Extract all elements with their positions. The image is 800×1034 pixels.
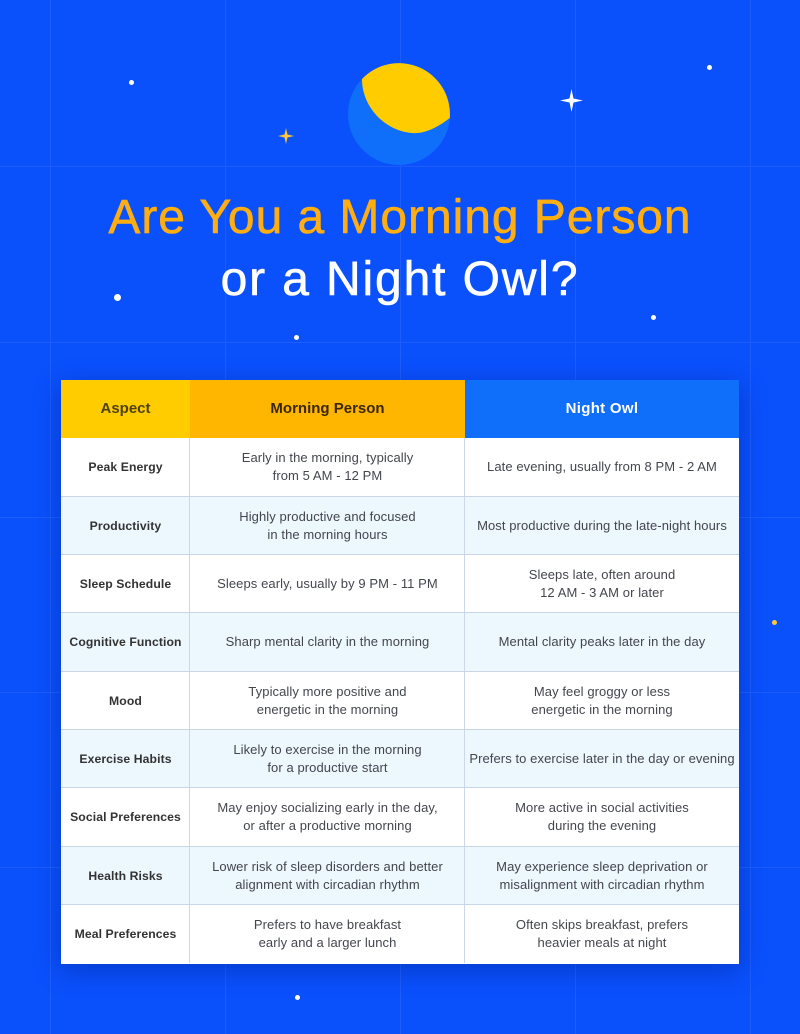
row: exercise habits: for a productive start bbox=[267, 760, 388, 774]
row: cognitive function: Cognitive Function bbox=[69, 635, 182, 649]
row: productivity: in the morning hours bbox=[267, 526, 388, 542]
row: sleep schedule: 12 AM - 3 AM or later bbox=[540, 584, 664, 600]
row: mood: Mood bbox=[109, 694, 142, 708]
row: productivity: Highly productive and focused bbox=[239, 508, 416, 524]
row: sleep schedule: Sleeps early, usually by 9 PM - 11 PM bbox=[217, 576, 438, 590]
row: exercise habits: Exercise Habits bbox=[79, 752, 172, 766]
row: social preferences: during the evening bbox=[548, 818, 656, 833]
row: cognitive function: Mental clarity peaks later in the day bbox=[499, 634, 705, 649]
row: social preferences: More active in social activities bbox=[515, 800, 689, 815]
row: social preferences: May enjoy socializing early in the day, bbox=[217, 800, 438, 815]
row: health risks: May experience sleep deprivation or bbox=[496, 858, 708, 874]
row: meal preferences: early and a larger lunch bbox=[259, 935, 396, 950]
row: health risks: misalignment with circadian rhythm bbox=[499, 876, 704, 892]
row: sleep schedule: Sleep Schedule bbox=[80, 576, 171, 590]
row: meal preferences: Prefers to have breakfast bbox=[254, 917, 401, 932]
row: mood: Typically more positive and bbox=[248, 684, 407, 698]
title bbox=[108, 191, 692, 306]
row: mood: energetic in the morning bbox=[257, 702, 398, 716]
row: health risks: alignment with circadian rhythm bbox=[235, 876, 420, 892]
row: productivity bbox=[61, 497, 739, 555]
row: peak energy: from 5 AM - 12 PM bbox=[273, 468, 382, 483]
row: sleep schedule bbox=[61, 555, 739, 613]
row: meal preferences: heavier meals at night bbox=[538, 935, 666, 950]
row: cognitive function: Sharp mental clarity in the morning bbox=[226, 634, 429, 649]
row: exercise habits: Likely to exercise in the morning bbox=[233, 742, 422, 756]
row: health risks bbox=[61, 847, 739, 905]
column heading: morning person bbox=[190, 380, 465, 438]
row: meal preferences bbox=[75, 905, 688, 963]
title: or a Night Owl? bbox=[221, 253, 579, 306]
row: exercise habits bbox=[61, 730, 739, 788]
row: social preferences: Social Preferences bbox=[70, 810, 181, 824]
row: social preferences: or after a productive morning bbox=[243, 818, 412, 833]
row: productivity: Most productive during the late-night hours bbox=[477, 518, 727, 532]
row: mood: May feel groggy or less bbox=[534, 684, 670, 698]
row: social preferences bbox=[61, 788, 739, 847]
row: peak energy: Late evening, usually from 8 PM - 2 AM bbox=[487, 459, 717, 474]
row: mood bbox=[61, 672, 739, 730]
row: peak energy: Early in the morning, typically bbox=[242, 450, 413, 465]
column heading: night owl: Night Owl bbox=[566, 400, 638, 417]
row: cognitive function bbox=[61, 613, 739, 672]
row: mood: energetic in the morning bbox=[531, 702, 673, 716]
row: health risks: Lower risk of sleep disorders and better bbox=[212, 858, 443, 874]
title: Are You a Morning Person bbox=[108, 191, 692, 244]
row: health risks: Health Risks bbox=[88, 868, 163, 882]
row: peak energy bbox=[61, 438, 739, 497]
icon: white sparkle bbox=[560, 89, 583, 112]
row: productivity: Productivity bbox=[90, 518, 161, 532]
column heading: morning person: Morning Person bbox=[270, 400, 385, 417]
row: exercise habits: Prefers to exercise later in the day or evening bbox=[469, 750, 735, 766]
column heading: night owl bbox=[465, 380, 739, 438]
row: peak energy: Peak Energy bbox=[88, 460, 163, 474]
icon: gold sparkle bbox=[278, 128, 294, 144]
row: sleep schedule: Sleeps late, often around bbox=[529, 566, 675, 582]
icon: crescent moon bbox=[348, 63, 450, 165]
comparison table bbox=[61, 380, 739, 964]
row: meal preferences: Meal Preferences bbox=[75, 927, 176, 941]
row: meal preferences: Often skips breakfast, prefers bbox=[516, 917, 688, 932]
table header bbox=[61, 380, 739, 438]
column heading: aspect: Aspect bbox=[100, 400, 151, 417]
column heading: aspect bbox=[61, 380, 190, 438]
